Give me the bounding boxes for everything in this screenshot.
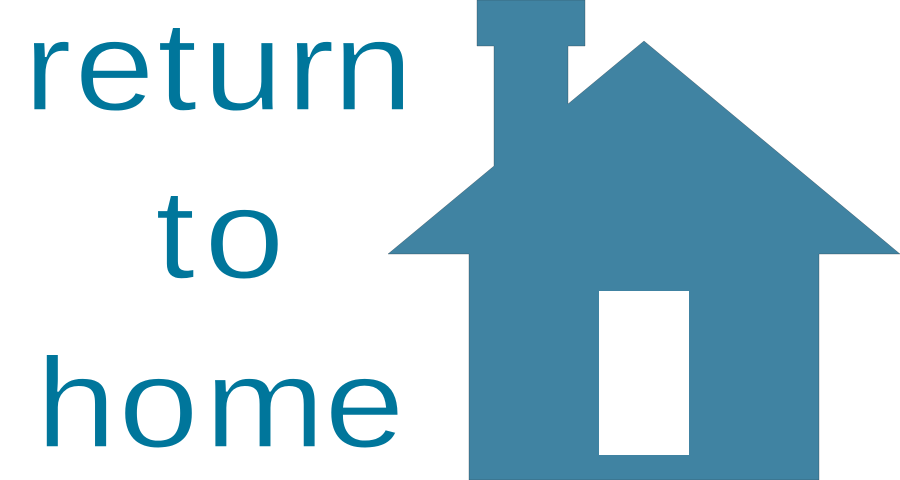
title: return to home <box>24 0 413 474</box>
icon: house <box>388 0 900 480</box>
house silhouette with chimney <box>388 0 900 480</box>
title: return to home: home <box>36 331 405 474</box>
door <box>599 291 689 455</box>
title: return to home: to <box>155 162 285 305</box>
